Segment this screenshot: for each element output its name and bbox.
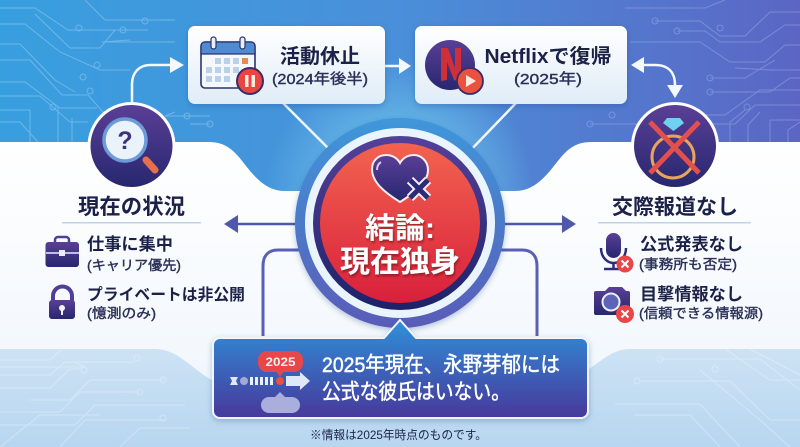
- text: work focus: 仕事に集中: [87, 235, 173, 254]
- arrow: hiatus to Netflix: [384, 58, 411, 74]
- arrow: Netflix to no reports: [631, 57, 683, 98]
- text: work focus: [87, 235, 181, 273]
- heading: current status: [62, 195, 201, 224]
- icon: magnifier question: [88, 102, 176, 190]
- icon: heart with cross: [372, 155, 428, 202]
- panel: hiatus: [188, 26, 385, 104]
- icon: microphone crossed: [601, 233, 634, 272]
- text: hiatus date: (2024年後半): [272, 71, 368, 88]
- icon: padlock: [49, 286, 75, 319]
- text: Netflix return: Netflixで復帰: [484, 45, 612, 68]
- icon: timeline 2025: [230, 351, 310, 413]
- connector: centre to banner: [263, 250, 537, 336]
- icon: timeline 2025: 2025: [266, 355, 296, 369]
- icon: camera crossed: [594, 287, 634, 323]
- text: summary: [322, 353, 560, 404]
- icon: briefcase: [46, 237, 79, 267]
- text: no sightings: 目撃情報なし: [640, 285, 743, 304]
- text: Netflix date: (2025年): [514, 71, 582, 88]
- arrow: left from centre: [224, 215, 295, 233]
- text: no announcement: [639, 235, 743, 272]
- text: private: プライベートは非公開: [87, 286, 245, 304]
- panel: conclusion circle: [295, 118, 505, 328]
- heading: current status: 現在の状況: [78, 195, 185, 219]
- text: private: [87, 286, 245, 321]
- text: no announcement: 公式発表なし: [640, 235, 743, 254]
- panel: summary banner: [213, 320, 588, 418]
- text: no sightings: (信頼できる情報源): [639, 306, 763, 321]
- icon: ring crossed out: [631, 102, 719, 190]
- text: private: (憶測のみ): [87, 306, 156, 321]
- panel: Netflix return: [415, 26, 627, 104]
- text: conclusion: 結論:: [365, 212, 435, 245]
- text: work focus: (キャリア優先): [87, 258, 181, 273]
- arrow: status to hiatus: [132, 57, 184, 102]
- icon: magnifier question: ?: [117, 127, 133, 155]
- text: hiatus: 活動休止: [280, 45, 360, 68]
- arrow: right from centre: [505, 215, 576, 233]
- text: summary: 2025年現在、永野芽郁には: [322, 353, 560, 377]
- text: no announcement: (事務所も否定): [639, 257, 737, 272]
- text: no sightings: [639, 285, 763, 321]
- text: summary: 公式な彼氏はいない。: [322, 380, 510, 404]
- text: single: 現在独身: [340, 246, 460, 279]
- icon: calendar with pause: [201, 37, 263, 94]
- text: footnote: ※情報は2025年時点のものです。: [310, 428, 487, 442]
- connector: box to centre lines: [283, 103, 516, 155]
- heading: no reports: 交際報道なし: [612, 196, 738, 219]
- icon: Netflix logo: [425, 40, 483, 94]
